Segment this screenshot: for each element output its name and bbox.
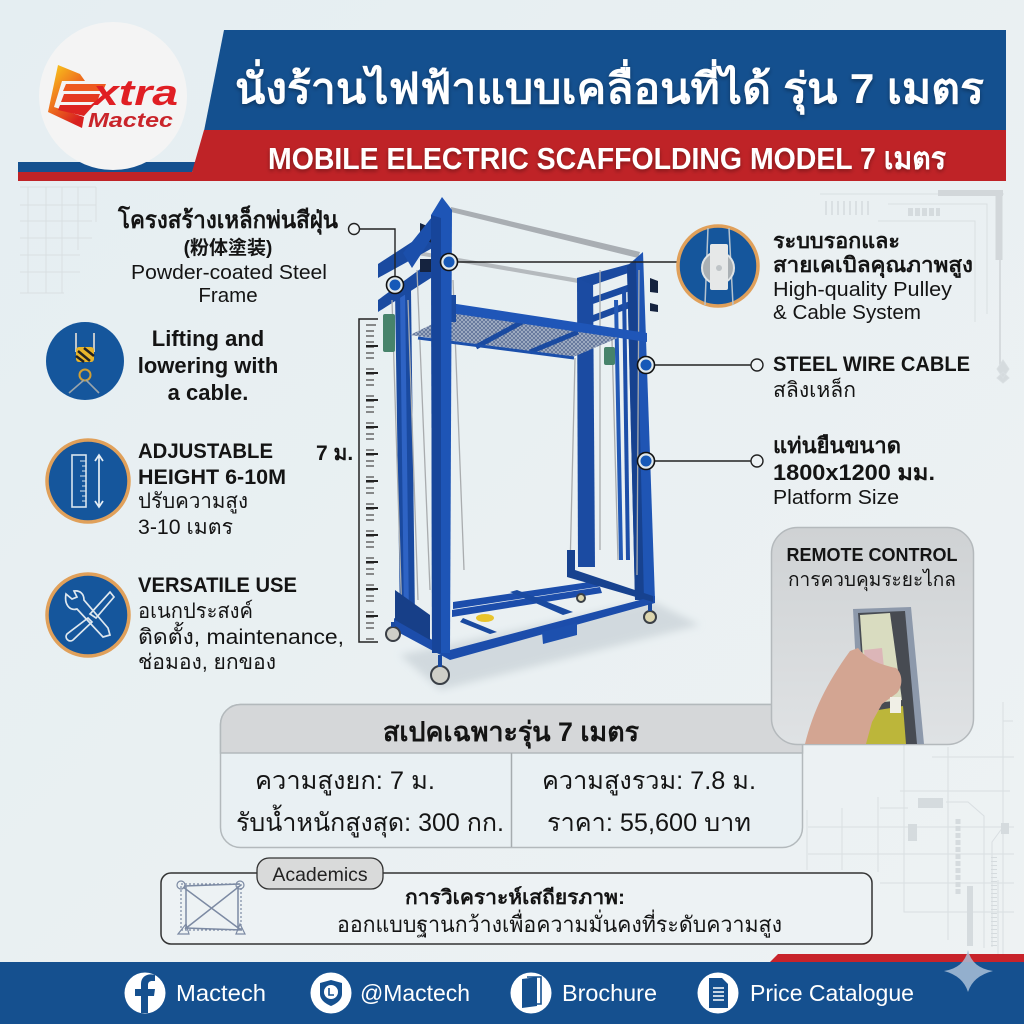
label: powder-coated frame	[117, 205, 339, 307]
line label: @Mactech	[360, 980, 470, 1006]
cables	[392, 270, 639, 620]
text: adjustable height: HEIGHT 6-10M	[138, 466, 286, 489]
label: pulley: High-quality Pulley	[773, 279, 952, 301]
upper cross beams	[378, 225, 438, 278]
label: pulley: ระบบรอกและ	[773, 230, 900, 253]
height label: 7 ม.	[316, 442, 353, 465]
right frame outer post	[627, 252, 655, 600]
label: powder-coated frame: โครงสร้างเหล็กพ่นสีฝุ่น	[117, 205, 339, 236]
text: adjustable height: ADJUSTABLE	[138, 440, 273, 463]
text: adjustable height	[138, 440, 286, 539]
label: powder-coated frame: Powder-coated Steel	[131, 261, 327, 284]
callout: steel wire	[638, 356, 763, 374]
academics tag	[257, 858, 383, 889]
label: platform size: แท่นยืนขนาด	[773, 433, 901, 458]
facebook icon	[124, 972, 166, 1014]
label: steel wire cable	[773, 353, 970, 402]
brochure icon	[510, 972, 552, 1014]
height scale ruler	[316, 319, 378, 642]
logo wordmark: xtra	[90, 72, 178, 113]
panel: remote control	[772, 528, 974, 744]
text: lifting	[138, 326, 278, 405]
front left post	[431, 197, 452, 653]
yellow cord reel	[476, 614, 494, 622]
hoist motors	[383, 314, 395, 352]
text: versatile use: ช่อมอง, ยกของ	[138, 651, 276, 674]
callout: pulley	[440, 254, 680, 270]
footer	[0, 950, 1024, 1024]
label: powder-coated frame: (粉体塗装)	[184, 236, 272, 259]
caster wheels	[386, 594, 656, 684]
text: lifting: a cable.	[168, 380, 248, 405]
callout: platform	[638, 452, 763, 470]
facebook label: Mactech	[176, 980, 266, 1006]
stability analysis box	[161, 858, 872, 944]
icon: ruler adjust	[47, 440, 129, 522]
line icon	[310, 972, 352, 1014]
platform mesh deck	[410, 313, 620, 357]
stability body: ออกแบบฐานกว้างเพื่อความมั่นคงที่ระดับความสูง	[337, 909, 782, 938]
header banner	[18, 30, 1006, 181]
price catalogue label: Price Catalogue	[750, 980, 914, 1006]
text: lifting: Lifting and	[152, 326, 264, 351]
label: pulley: สายเคเบิลคุณภาพสูง	[773, 254, 973, 279]
label: powder-coated frame: Frame	[198, 284, 258, 307]
spec heading: สเปคเฉพาะรุ่น 7 เมตร	[383, 717, 639, 749]
text: lifting: lowering with	[138, 353, 278, 378]
logo: Mactec	[88, 110, 173, 132]
callout: frame	[348, 224, 404, 294]
price catalogue icon	[698, 972, 738, 1014]
footer red accent	[770, 954, 1024, 962]
stability heading: การวิเคราะห์เสถียรภาพ:	[405, 886, 625, 909]
spec: lift height: ความสูงยก: 7 ม.	[255, 767, 435, 796]
label: steel wire cable: สลิงเหล็ก	[773, 376, 856, 402]
spec: total height: ความสูงรวม: 7.8 ม.	[542, 767, 756, 796]
remote and hand	[805, 607, 924, 744]
label: steel wire cable: STEEL WIRE CABLE	[773, 353, 970, 376]
logo	[39, 22, 187, 170]
text: versatile use: อเนกประสงค์	[138, 599, 253, 623]
rear left post	[395, 290, 415, 620]
remote subheading: การควบคุมระยะไกล	[788, 568, 956, 592]
spec: max load: รับน้ำหนักสูงสุด: 300 กก.	[236, 804, 504, 838]
stability diagram icon	[177, 881, 245, 934]
right frame rear post	[577, 274, 595, 567]
footer band	[0, 962, 1024, 1024]
icon: wrench and screwdriver	[47, 574, 129, 656]
label: platform size: Platform Size	[773, 487, 899, 509]
subtitle: MOBILE ELECTRIC SCAFFOLDING MODEL 7 เมตร	[268, 141, 946, 176]
academics tag: Academics	[272, 864, 368, 886]
red subtitle band	[18, 130, 1006, 181]
text: adjustable height: ปรับความสูง	[138, 490, 248, 514]
label: pulley	[773, 230, 973, 324]
icon: crane hook	[46, 322, 124, 400]
text: versatile use: ติดตั้ง, maintenance,	[138, 622, 344, 649]
label: platform size	[773, 433, 935, 509]
spec table body	[220, 704, 802, 848]
platform front rail	[450, 303, 647, 342]
text: adjustable height: 3-10 เมตร	[138, 516, 233, 539]
blue left stripe	[18, 162, 196, 172]
label: pulley: & Cable System	[773, 302, 921, 324]
spec: price: ราคา: 55,600 บาท	[547, 809, 751, 837]
text: versatile use	[138, 574, 344, 674]
spec table	[220, 704, 802, 848]
title: นั่งร้านไฟฟ้าแบบเคลื่อนที่ได้ รุ่น 7 เมตร	[235, 59, 984, 115]
icon: pulley	[678, 226, 758, 306]
top rails	[451, 207, 640, 258]
base frame	[394, 596, 655, 660]
footer sparkle	[944, 950, 993, 992]
spec table header	[220, 704, 802, 753]
brochure label: Brochure	[562, 980, 657, 1006]
ground shadow	[400, 600, 700, 690]
logo E mark	[48, 65, 106, 128]
scaffold tower photo illustration	[378, 197, 700, 690]
label: platform size: 1800x1200 มม.	[773, 460, 935, 485]
remote heading: REMOTE CONTROL	[786, 545, 958, 565]
text: versatile use: VERSATILE USE	[138, 574, 297, 597]
blue title band	[204, 30, 1006, 131]
